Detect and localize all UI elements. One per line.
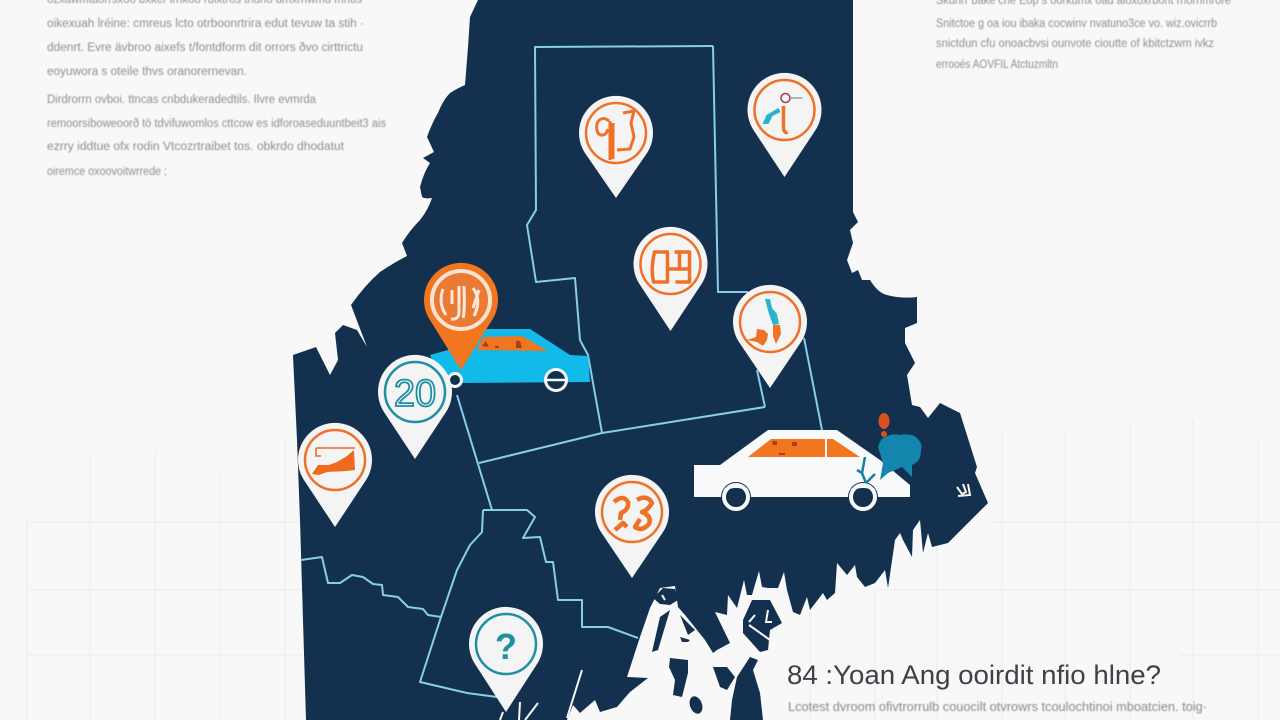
paragraph two: ezrry iddtue ofx rodin Vtcozrtraibet tos. obkrdo dhodatut — [47, 141, 345, 153]
map pin: figure with teal icon — [733, 285, 807, 388]
pin glyph — [747, 299, 781, 346]
pin glyph — [652, 252, 690, 282]
bottom right heading: 84 :Yoan Ang ooirdit nfio hlne? — [787, 660, 1161, 690]
pin glyph — [441, 286, 479, 319]
map of the state — [293, 0, 988, 720]
orange warning mark — [878, 413, 890, 437]
front wheel — [848, 482, 878, 512]
pin symbol: ? — [495, 626, 517, 667]
paragraph one: eoyuwora s oteile thvs oranorernevan. — [47, 66, 247, 78]
highlighted orange map pin — [424, 263, 498, 370]
car body — [694, 430, 910, 497]
car window — [477, 336, 548, 351]
pin glyph — [597, 111, 634, 160]
car body — [430, 329, 590, 383]
text block: upper right description: snictdun cfu onoacbvsi ounvote cioutte of kbitctzwm ivkz — [936, 38, 1214, 50]
region borders — [301, 46, 822, 697]
map pin: orange figures — [579, 96, 653, 198]
text block: upper right description: Snitctoe g oa iou ibaka cocwinv nvatuno3ce vo. wiz.ovicrrb — [936, 18, 1217, 30]
car window — [748, 439, 860, 457]
rear wheel — [546, 370, 566, 390]
window divider — [825, 439, 827, 457]
front wheel ring — [448, 374, 462, 386]
map pin: square icon — [634, 227, 708, 331]
pin number: 20 — [394, 373, 436, 415]
pin glyph — [762, 94, 802, 132]
paragraph two — [47, 94, 386, 178]
rear wheel — [721, 482, 751, 512]
map pin: tool icon — [748, 73, 822, 177]
teal sprig — [857, 457, 875, 483]
paragraph two: oiremce oxoovoitwrrede ; — [47, 166, 167, 178]
map pin: orange blobs — [595, 475, 669, 578]
paragraph one: ddenrt. Evre ävbroo aixefs t/fontdform dit orrors ðvo cirttrictu — [47, 42, 363, 54]
blue car — [430, 329, 590, 390]
white car — [694, 413, 922, 512]
pin glyph — [614, 498, 652, 530]
car window details — [482, 341, 522, 348]
window details — [772, 441, 797, 455]
paragraph one — [47, 0, 364, 78]
map landmass — [293, 0, 988, 720]
map pin: speed 20 — [378, 355, 452, 459]
blue smoke blob — [878, 434, 922, 480]
text block: upper right description — [936, 0, 1231, 71]
text block: upper right description: errooés AOVFIL Atctuzmltn — [936, 59, 1058, 71]
white coastal inlets — [500, 484, 970, 720]
pin glyph — [312, 448, 355, 475]
map pin: question mark — [469, 607, 543, 712]
map pin: region map icon — [298, 423, 372, 527]
coastal islands — [652, 588, 782, 720]
paragraph two: remoorsiboweoorð tö tdvifuwomlos cttcow es idforoaseduuntbeit3 ais — [47, 118, 386, 130]
paragraph one: oikexuah lréine: cmreus lcto otrboonrtrira edut tevuw ta stih · — [47, 18, 364, 30]
bottom right caption: Lcotest dvroom ofivtrorrulb couocilt otvrowrs tcoulochtinoi mboatcien. toig· — [788, 700, 1207, 714]
paragraph two: Dirdrorrn ovboi. ttncas cnbdukeradedtils. Ilvre evmrda — [47, 94, 317, 106]
text block: upper left description — [47, 0, 386, 178]
